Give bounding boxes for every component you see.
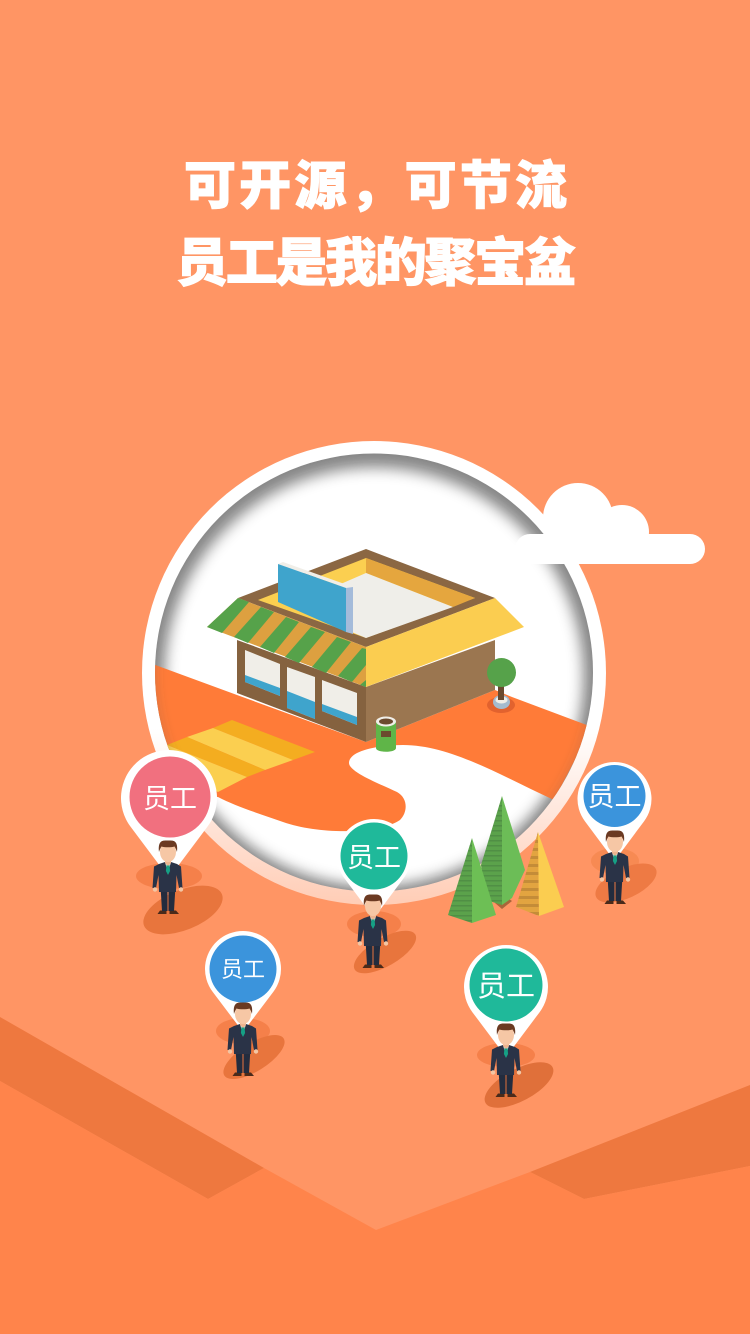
bottom orange envelope panel [0,1081,750,1334]
striped awning [207,598,366,687]
employee pin: pink: 员工 [143,784,197,814]
scene inside circle [140,452,595,894]
bottom darker folded bands [0,1017,750,1199]
employee pin: blue right [578,762,662,911]
tall green tree [481,796,525,909]
trash bin [376,716,396,752]
orange ground [140,663,592,831]
employee pin: teal center [337,819,422,982]
title: 可开源，可节流 [184,158,567,216]
employee pin: blue lower left [205,931,291,1087]
employee pin: blue right: 员工 [588,782,642,812]
employee pin: teal lower [464,945,560,1117]
trees [448,796,564,923]
store building [207,549,524,742]
cloud [515,483,705,564]
inner edge shading over ground [155,665,586,890]
roof floor [290,573,453,638]
circle frame ring [142,441,606,905]
billboard [278,562,353,634]
title: 员工是我的聚宝盆 [176,235,576,293]
employee pin: pink [121,750,229,944]
roof frame [238,549,495,647]
inner shadow [154,452,594,892]
yellow awning [366,598,524,687]
yellow tree [516,832,564,916]
walls [237,640,366,742]
small green tree [448,838,496,923]
employee pin: teal center: 员工 [347,843,401,873]
employee pin: teal lower: 员工 [477,971,535,1003]
crosswalk [167,720,315,792]
employee pin: blue lower left: 员工 [221,957,265,982]
title [176,158,576,293]
windows [245,650,357,725]
potted tree [487,658,516,713]
